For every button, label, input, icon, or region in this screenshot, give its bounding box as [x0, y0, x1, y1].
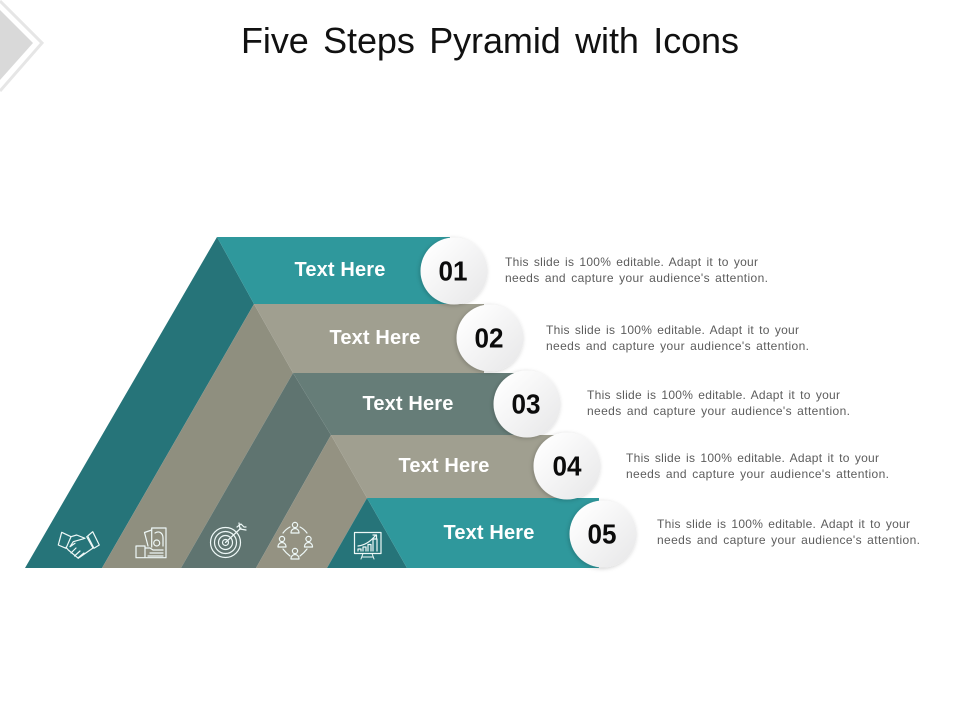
- band 2: [254, 304, 484, 373]
- band 3: [293, 373, 523, 435]
- band 5: [367, 498, 599, 568]
- description 5: needs and capture your audience's attention.: [657, 533, 920, 547]
- description 1: This slide is 100% editable. Adapt it to your: [505, 255, 758, 269]
- number badge 05: 05: [588, 518, 616, 550]
- step 1 label: Text Here: [294, 259, 386, 281]
- step 3 label: Text Here: [362, 393, 454, 415]
- description 3: [587, 388, 850, 418]
- description 2: This slide is 100% editable. Adapt it to your: [546, 323, 799, 337]
- number badge 01: [420, 238, 488, 304]
- band 4: [331, 435, 563, 498]
- title: Five Steps Pyramid with Icons: [241, 20, 739, 61]
- description 1: [505, 255, 768, 285]
- number badge 01: 01: [438, 256, 468, 286]
- number badge 04: [534, 432, 600, 500]
- description 5: [657, 517, 920, 547]
- band 1: [217, 237, 450, 304]
- corner decoration: [0, 1, 42, 91]
- number badge 05: [570, 500, 636, 568]
- description 4: [626, 451, 889, 481]
- description 2: [546, 323, 809, 353]
- left face 1: [25, 237, 254, 568]
- left face 4: [256, 435, 367, 568]
- description 2: needs and capture your audience's attention.: [546, 339, 809, 353]
- step 2 label: Text Here: [329, 327, 421, 349]
- icon: presentation chart: [354, 532, 381, 559]
- icon: handshake: [58, 532, 99, 558]
- icon: money in hand: [136, 528, 166, 558]
- left face 3: [181, 373, 331, 568]
- number badge 02: 02: [474, 322, 504, 354]
- number badge 04: 04: [552, 450, 582, 482]
- step 4 label: Text Here: [398, 455, 490, 477]
- number badge 03: [494, 370, 560, 438]
- step 5 label: Text Here: [443, 522, 535, 544]
- icon: target with arrow: [210, 523, 246, 558]
- description 4: This slide is 100% editable. Adapt it to your: [626, 451, 879, 465]
- description 4: needs and capture your audience's attention.: [626, 467, 889, 481]
- description 3: This slide is 100% editable. Adapt it to your: [587, 388, 840, 402]
- pyramid: [25, 237, 599, 568]
- description 3: needs and capture your audience's attention.: [587, 404, 850, 418]
- description 1: needs and capture your audience's attention.: [505, 271, 768, 285]
- description 5: This slide is 100% editable. Adapt it to your: [657, 517, 910, 531]
- icon: team circle: [278, 522, 312, 559]
- left face 5: [327, 498, 407, 568]
- number badge 03: 03: [512, 388, 540, 420]
- left face 2: [102, 304, 293, 568]
- number badge 02: [456, 304, 524, 372]
